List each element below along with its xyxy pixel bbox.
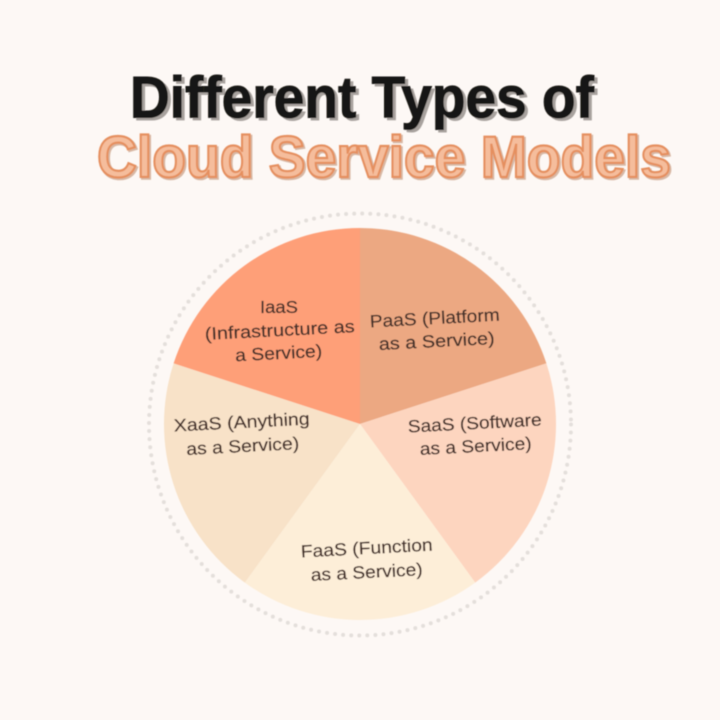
slice: IaaS: IaaS [260, 297, 298, 317]
slice: PaaS: PaaS (Platform [369, 305, 500, 331]
slice: SaaS: as a Service) [419, 433, 532, 459]
slice: SaaS [360, 363, 556, 583]
slice: SaaS: SaaS (Software [407, 410, 542, 437]
slice: FaaS: FaaS (Function [300, 535, 433, 561]
slice: IaaS: (Infrastructure as [204, 316, 355, 344]
slice: XaaS [164, 363, 360, 583]
title line 1: Different Types of [130, 66, 595, 130]
slice: XaaS: XaaS (Anything [173, 408, 310, 436]
pie chart [164, 228, 556, 620]
title line 2: Cloud Service Models [98, 126, 672, 192]
slice: FaaS: as a Service) [310, 559, 423, 585]
dotted ring [149, 214, 571, 636]
slice: IaaS: a Service) [235, 341, 323, 365]
title [97, 66, 672, 192]
slice: IaaS [174, 228, 360, 424]
title line 1: Different Types of [133, 68, 598, 133]
slice: FaaS [245, 424, 475, 620]
slice: PaaS: as a Service) [378, 328, 495, 354]
slice: XaaS: as a Service) [186, 433, 300, 459]
slice: PaaS [360, 228, 546, 424]
title line 2: Cloud Service Models [97, 125, 671, 190]
